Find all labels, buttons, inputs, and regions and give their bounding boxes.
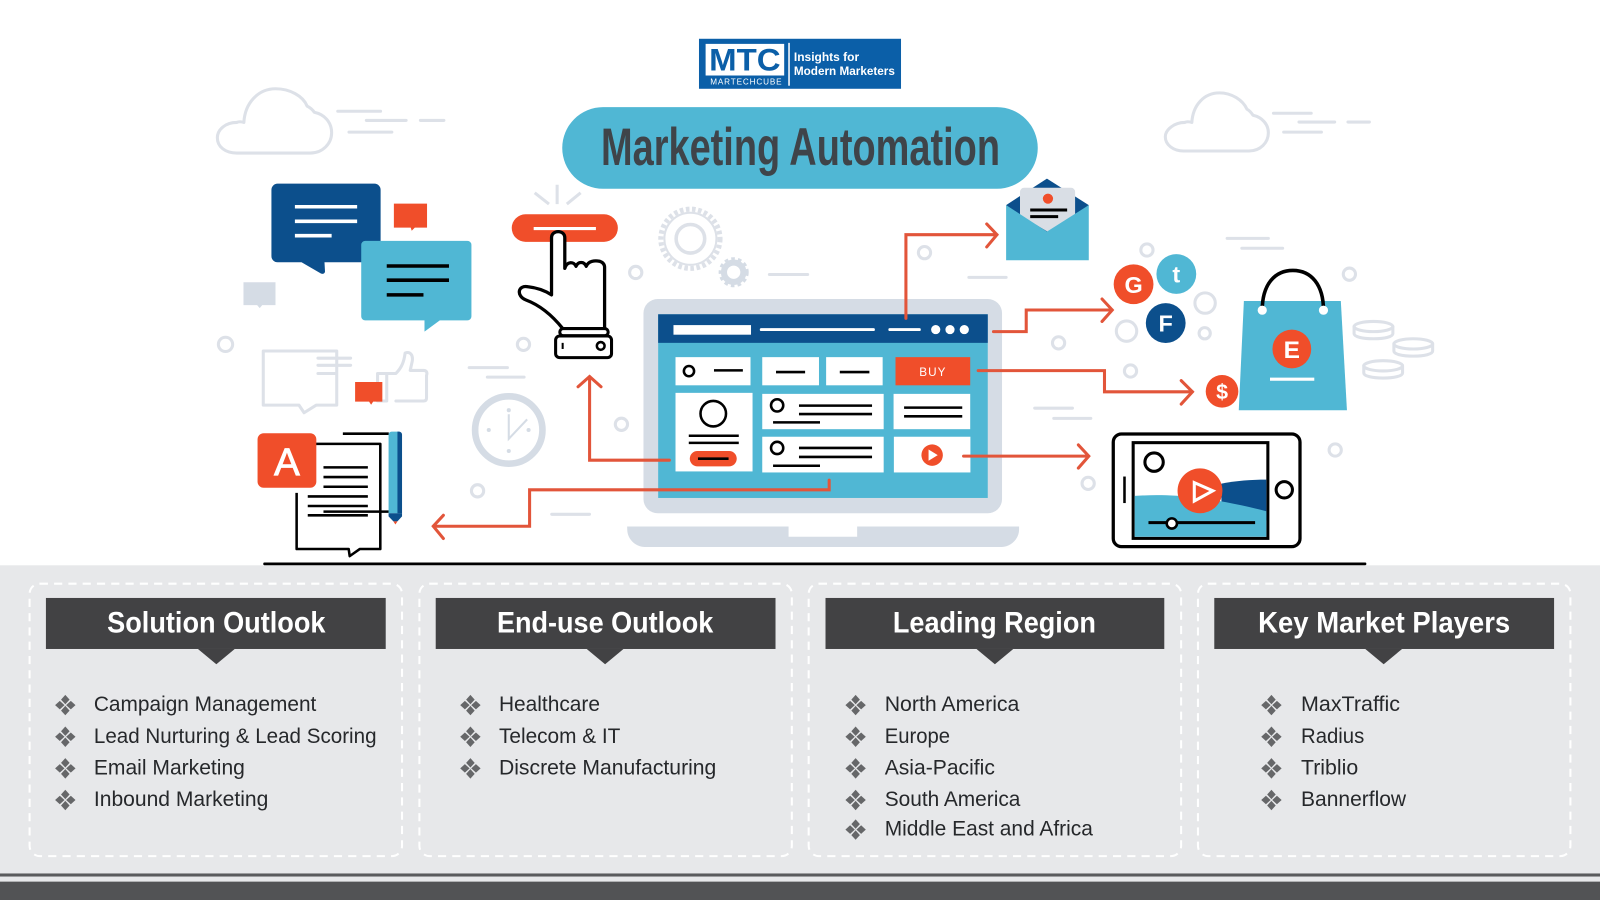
heading: End-use Outlook: End-use Outlook <box>497 607 714 640</box>
title pill: Marketing Automation <box>601 118 1000 177</box>
arrow: buy to coin <box>978 371 1192 404</box>
list: end uses: Healthcare <box>499 692 600 716</box>
list: regions: Middle East and Africa <box>885 817 1093 841</box>
icon: hand pressing button <box>512 185 618 358</box>
icon: clock <box>475 396 542 464</box>
panel: Key Market Players <box>1198 584 1570 856</box>
icon: gears <box>661 209 747 286</box>
list: regions: North America <box>885 692 1019 716</box>
icon: envelope <box>1006 179 1089 260</box>
logo: MTC Martechcube: MARTECHCUBE <box>710 78 782 87</box>
icon: shopping bag <box>1239 270 1347 410</box>
list: regions: Asia-Pacific <box>885 755 995 779</box>
list: solutions: Email Marketing <box>94 755 245 779</box>
icon: social circles: G <box>1124 272 1143 298</box>
logo: MTC Martechcube <box>699 39 901 89</box>
panel: End-use Outlook <box>419 584 792 856</box>
list: regions: South America <box>885 787 1020 811</box>
list: solutions: Inbound Marketing <box>94 787 268 811</box>
title pill <box>562 107 1038 189</box>
list: players <box>1261 692 1407 811</box>
arrow: profile up to hand <box>578 377 669 460</box>
heading: Leading Region: Leading Region <box>893 607 1096 640</box>
arrow: play to tablet <box>964 445 1089 468</box>
list: solutions: Campaign Management <box>94 692 316 716</box>
arrow: list to document <box>433 480 829 538</box>
heading: Key Market Players: Key Market Players <box>1258 607 1510 640</box>
icon: coins <box>1354 321 1433 378</box>
icon: document with letter A and pencil: A <box>274 442 300 485</box>
list: regions <box>845 692 1093 841</box>
icon: outline speech bubble and thumbs up <box>263 351 427 413</box>
list: players: Bannerflow <box>1301 787 1407 811</box>
list: players: MaxTraffic <box>1301 692 1400 716</box>
dashboard cards <box>676 357 970 472</box>
icon: laptop with dashboard <box>627 299 1019 547</box>
list: players: Triblio <box>1301 755 1358 779</box>
list: regions: Europe <box>885 724 950 748</box>
logo: MTC Martechcube: MTC <box>709 41 781 77</box>
heading: Solution Outlook <box>46 598 386 664</box>
panel: Leading Region <box>809 584 1181 856</box>
background decoration: clouds, dashes and small rings <box>217 89 1369 514</box>
icon: chat bubbles <box>243 184 471 332</box>
logo: MTC Martechcube: Insights for <box>794 51 860 64</box>
arrow: to social icons <box>993 299 1112 332</box>
list: end uses <box>460 692 716 779</box>
list: solutions: Lead Nurturing & Lead Scoring <box>94 724 377 748</box>
icon: social circles <box>1114 254 1196 343</box>
list: end uses: Telecom & IT <box>499 724 620 748</box>
icon: tablet with video player <box>1113 434 1300 547</box>
logo: MTC Martechcube: Modern Marketers <box>794 65 895 78</box>
heading: Key Market Players <box>1214 598 1554 664</box>
bottom band <box>0 563 1600 900</box>
list: players: Radius <box>1301 724 1364 748</box>
icon: dollar coin <box>1206 375 1238 408</box>
list: solutions <box>55 692 377 811</box>
icon: document with letter A and pencil <box>258 432 402 556</box>
icon: social circles: F <box>1159 311 1173 337</box>
list: end uses: Discrete Manufacturing <box>499 755 716 779</box>
heading: End-use Outlook <box>436 598 776 664</box>
icon: dollar coin: $ <box>1216 380 1228 404</box>
arrow: to envelope <box>906 224 997 318</box>
heading: Solution Outlook: Solution Outlook <box>107 607 326 640</box>
heading: Leading Region <box>826 598 1164 664</box>
icon: social circles: t <box>1172 262 1180 288</box>
panel: Solution Outlook <box>30 584 402 856</box>
icon: shopping bag: E <box>1284 337 1300 364</box>
dashboard cards: BUY <box>919 366 946 379</box>
